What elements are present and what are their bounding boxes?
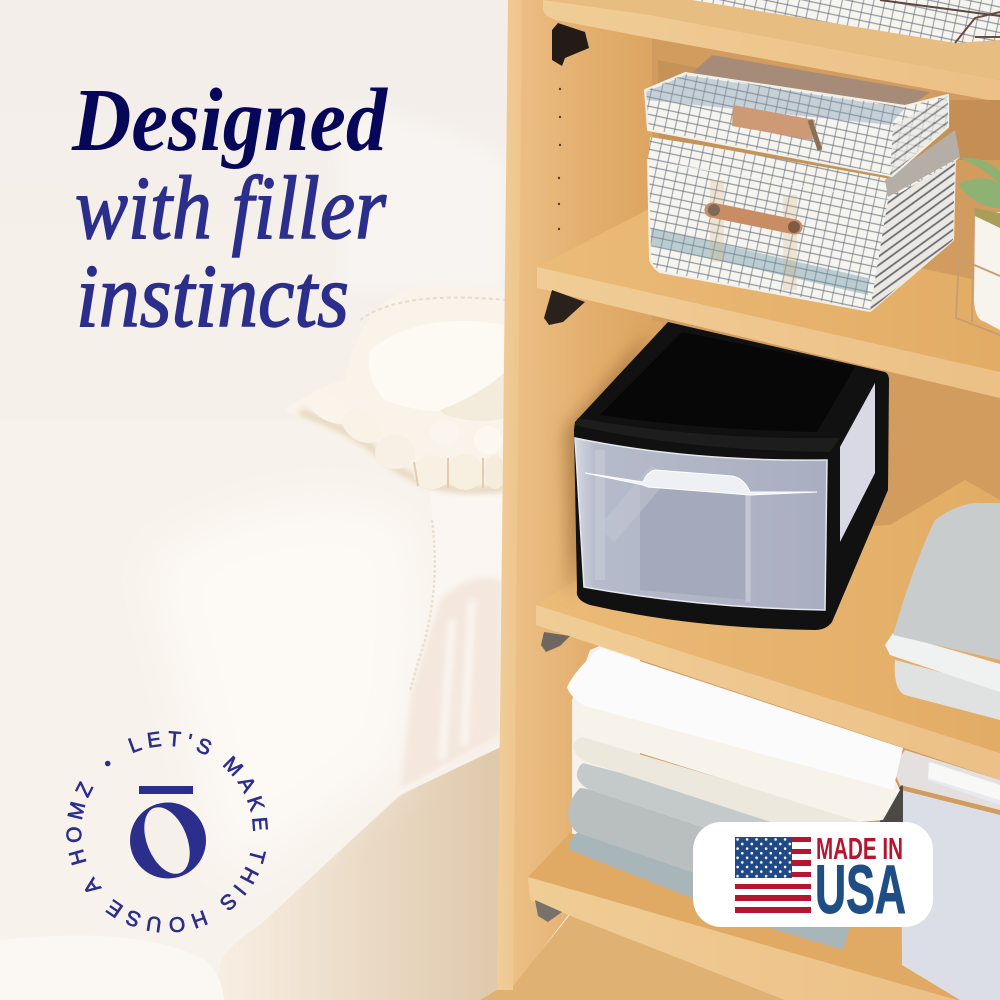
bottom shelf [528, 833, 1000, 1000]
top shelf quilted basket [692, 0, 1000, 43]
floor under bottom shelf [480, 912, 800, 1000]
logo macron [139, 786, 193, 794]
top basket [645, 55, 948, 176]
floor [212, 745, 505, 1000]
cream cloth [575, 707, 900, 822]
title line 1: Designed [71, 71, 389, 170]
side wall [510, 0, 662, 992]
bed with comforter [0, 420, 505, 1000]
drawer shadow [565, 330, 650, 600]
stacked fabric baskets [645, 55, 960, 311]
drawer body [574, 322, 889, 630]
grey top towel [893, 503, 1000, 660]
white cloth [567, 648, 903, 790]
US flag [735, 837, 811, 913]
stamp ring text [81, 746, 253, 918]
foot of bed [0, 936, 224, 1000]
drawer rim [575, 418, 840, 452]
comforter braid edge [410, 520, 435, 690]
hinge third [541, 632, 570, 652]
made in USA badge [693, 822, 933, 928]
title line 2: with filler [75, 159, 387, 258]
leaves [958, 158, 1000, 208]
drawer handle [585, 470, 817, 495]
pot [974, 212, 1000, 330]
title [71, 71, 389, 346]
potted plant in wire stand [956, 158, 1000, 335]
grey cloth upper [577, 763, 880, 860]
drawer lid [600, 332, 855, 432]
logo letter o [130, 801, 206, 880]
folded clothes stack on bottom shelf [567, 648, 903, 950]
bin lid [892, 750, 1000, 810]
blue plaid band [651, 228, 868, 295]
white contents [928, 762, 1000, 805]
stamp bullet [105, 761, 110, 766]
folded clothes stack on third shelf [885, 503, 1000, 720]
second shelf [537, 100, 1000, 398]
hinge top [552, 23, 589, 66]
white middle towel [885, 633, 1000, 692]
dark gap [880, 785, 903, 825]
bed side with folds [398, 490, 503, 795]
back wall [640, 0, 1000, 1000]
made in label: MADE IN [816, 831, 903, 866]
wire stand [956, 195, 1000, 335]
lower basket [648, 157, 955, 311]
white lower towel [895, 660, 1000, 720]
top shelf [543, 0, 1000, 102]
hinge second [544, 290, 585, 325]
panel front edge [497, 0, 522, 990]
title line 3: instincts [76, 247, 349, 346]
third shelf [536, 480, 1000, 780]
bin body [901, 790, 1000, 1000]
shadow behind baskets [658, 60, 950, 240]
blue-grey cloth [570, 833, 850, 950]
shelf peg holes [558, 88, 561, 230]
wooden shelving unit [480, 0, 1000, 1000]
knotted pillow [285, 285, 506, 490]
folded lid rim [648, 132, 960, 200]
grey cloth [568, 788, 845, 925]
clear storage bin [892, 750, 1000, 1000]
tan plaid band [717, 180, 790, 290]
top handle [732, 105, 815, 140]
lower handle [712, 210, 795, 227]
drawer front [575, 438, 827, 610]
drawer side window [840, 383, 875, 542]
off-white knit [573, 737, 860, 825]
USA label: USA [815, 851, 906, 928]
hinge bottom [535, 900, 562, 922]
black plastic drawer [565, 322, 889, 630]
round brand stamp: LET'S MAKE THIS HOUSE A HOMZ [66, 730, 268, 933]
